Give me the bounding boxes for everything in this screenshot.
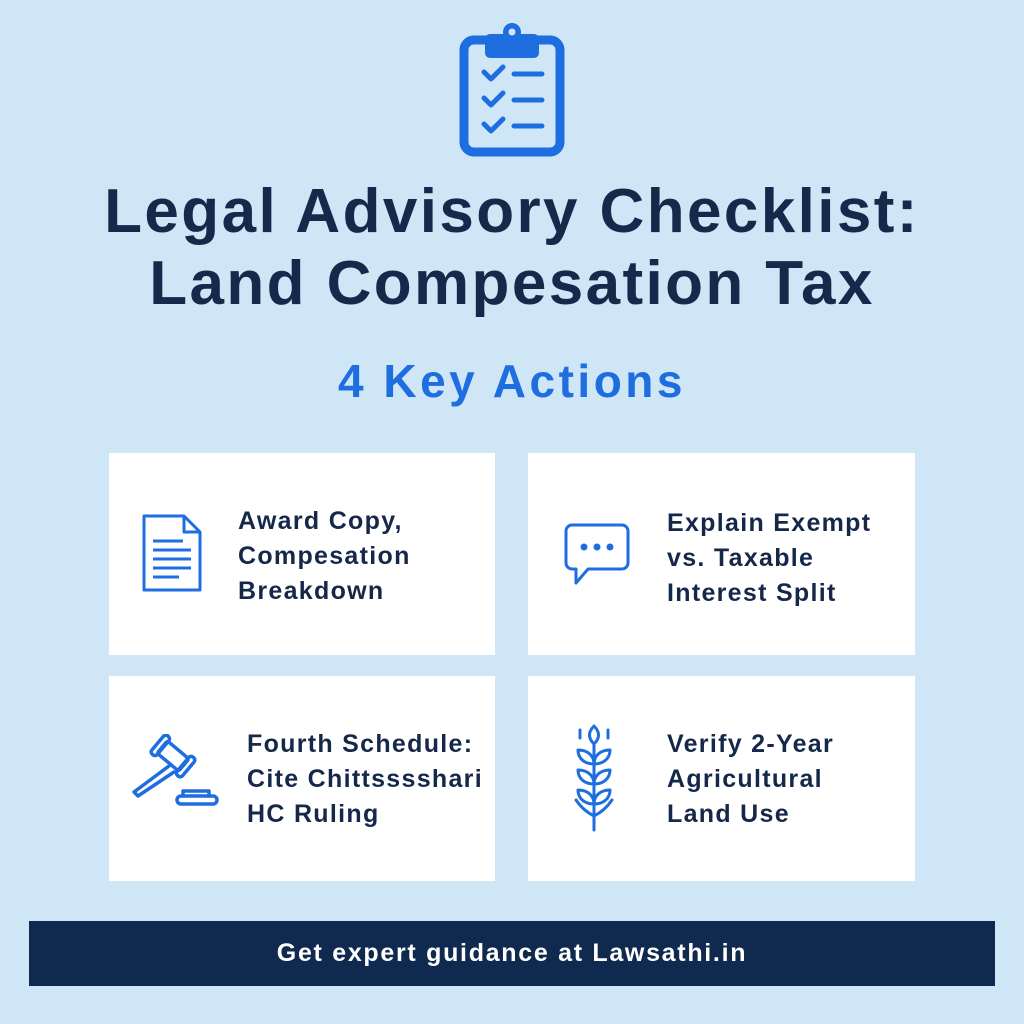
text (667, 509, 871, 607)
text: Land Use (667, 800, 790, 828)
text: HC Ruling (247, 800, 380, 828)
icon: document (142, 514, 202, 592)
text: Breakdown (238, 577, 384, 605)
text: Award Copy, (238, 507, 403, 535)
text: Agricultural (667, 765, 823, 793)
text (247, 730, 483, 828)
title: Legal Advisory Checklist: (104, 177, 920, 246)
subtitle: 4 Key Actions (338, 355, 686, 407)
text: Interest Split (667, 579, 837, 607)
icon: gavel (132, 734, 219, 806)
text (238, 507, 411, 605)
icon: wheat (574, 724, 614, 832)
text: Fourth Schedule: (247, 730, 473, 758)
text: vs. Taxable (667, 544, 814, 572)
text: Cite Chittsssshari (247, 765, 483, 793)
icon: clipboard (460, 23, 564, 156)
title (104, 177, 920, 318)
panel: agricultural land (528, 676, 915, 881)
text: Compesation (238, 542, 411, 570)
panel: fourth schedule (109, 676, 495, 881)
footer banner (29, 921, 995, 986)
footer banner: Get expert guidance at Lawsathi.in (277, 939, 747, 967)
icon: speech bubble (564, 524, 630, 585)
panel: award copy (109, 453, 495, 655)
text: Explain Exempt (667, 509, 871, 537)
title: Land Compesation Tax (149, 249, 875, 318)
panel: explain split (528, 453, 915, 655)
text: Verify 2-Year (667, 730, 834, 758)
text (667, 730, 834, 828)
